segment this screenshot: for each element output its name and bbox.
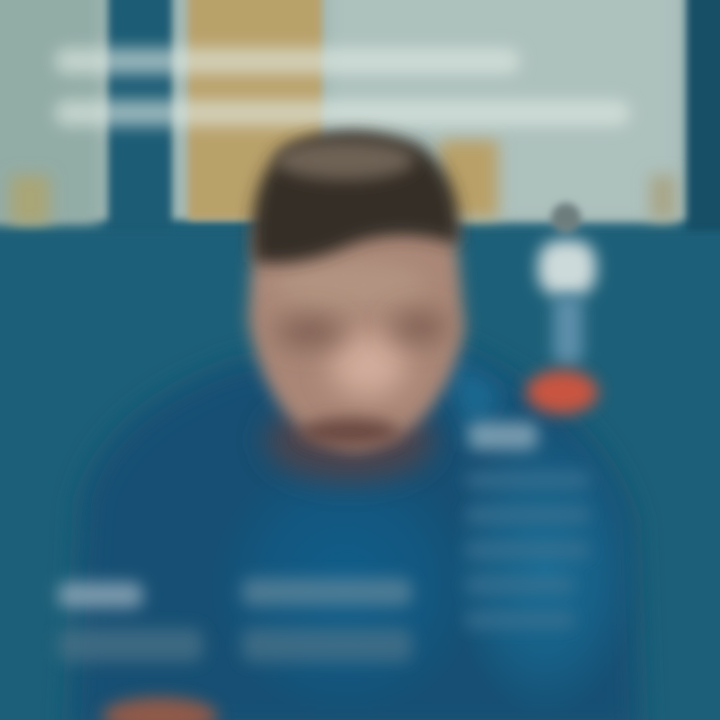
heading: blurred title lines [55, 48, 630, 126]
person: shirt [70, 350, 640, 720]
small figure illustration [526, 203, 598, 414]
text block: lower centre [242, 578, 412, 662]
figure head [551, 203, 581, 233]
figure torso [538, 240, 596, 296]
figure red base [526, 370, 598, 414]
text block: right column [465, 422, 590, 628]
person: hair [252, 132, 459, 263]
text block: lower left [58, 582, 203, 662]
figure legs [553, 295, 583, 365]
person: neck and face [248, 220, 465, 482]
person: hand at bottom edge [102, 697, 218, 720]
